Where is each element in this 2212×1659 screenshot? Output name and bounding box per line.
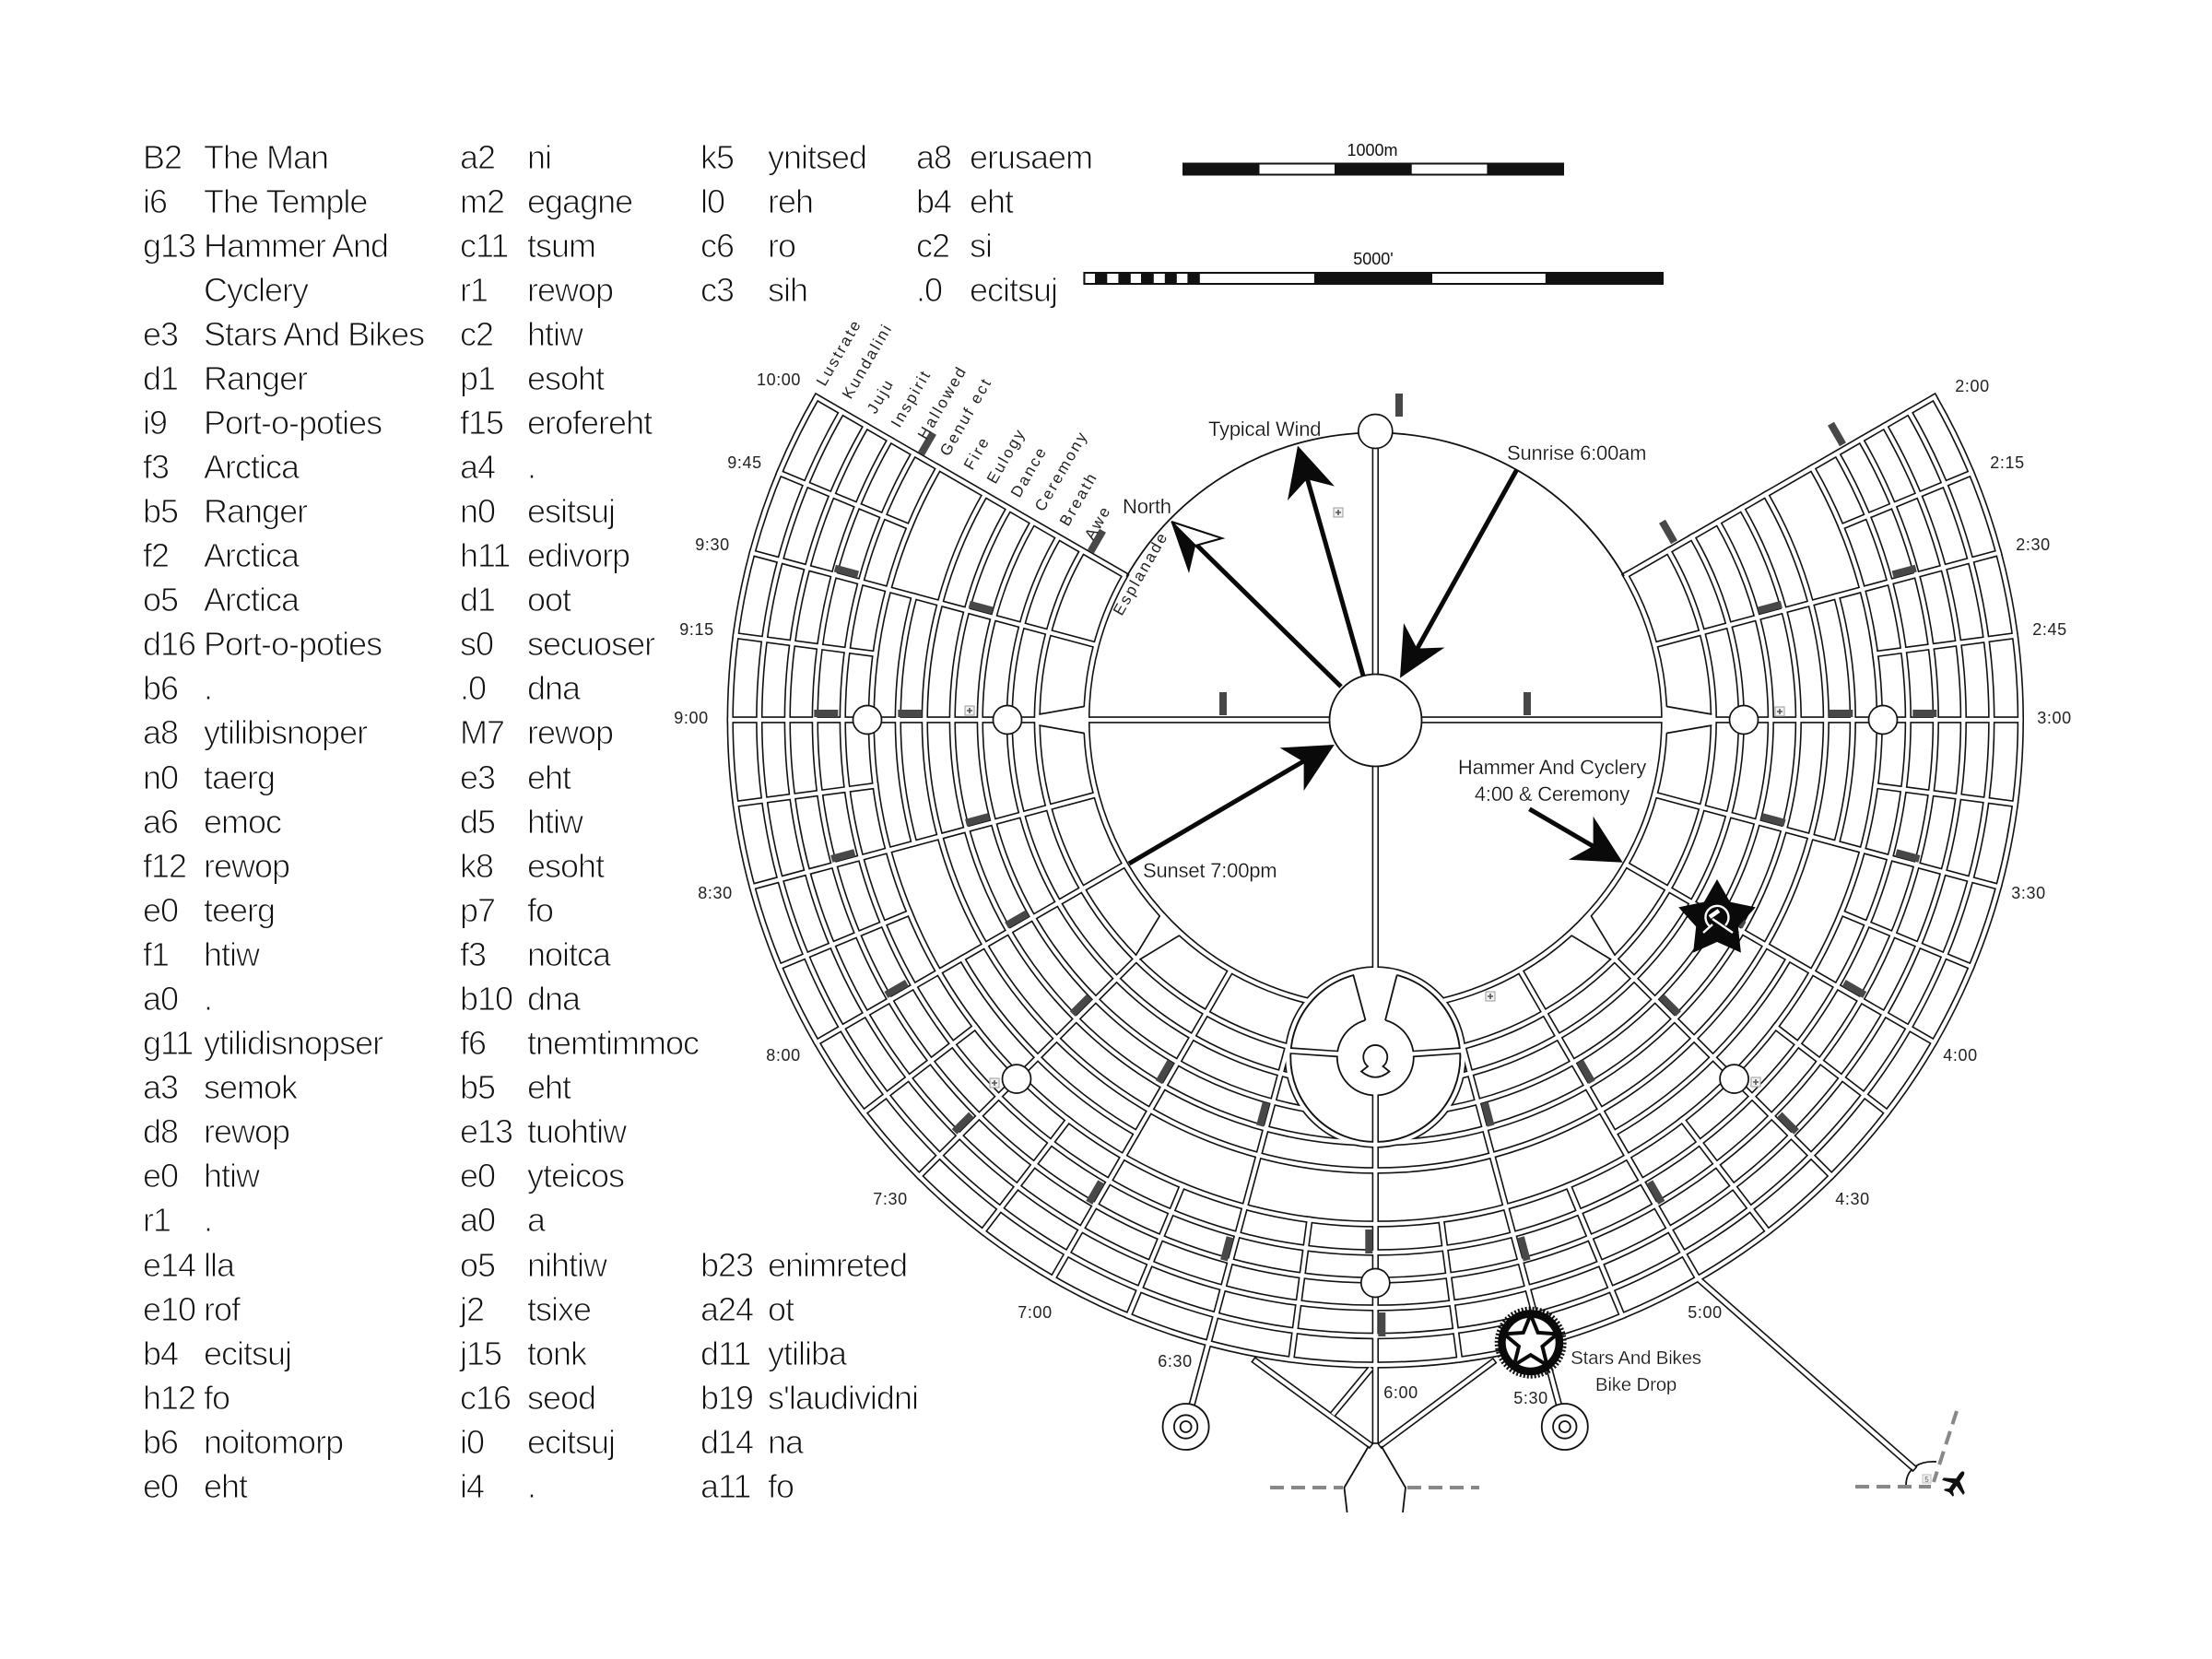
legend column 1: a8: [143, 713, 178, 751]
legend column 2: eht: [527, 759, 571, 796]
legend column 1: Port-o-poties: [204, 625, 382, 663]
legend column 3 bottom: a24: [700, 1290, 753, 1328]
legend column 1: h12: [143, 1379, 195, 1417]
legend column 2: rewop: [527, 271, 613, 309]
legend column 1: teerg: [204, 891, 275, 929]
legend column 1: n0: [143, 759, 178, 796]
upper esplanade arc: [1088, 433, 1663, 1006]
legend column 3 bottom: a11: [700, 1467, 750, 1505]
legend column 2: noitca: [527, 935, 612, 973]
street name labels: Fire: [960, 433, 994, 473]
legend column 1: e14: [143, 1246, 195, 1284]
icon: person: [1361, 1045, 1390, 1077]
legend column 2: d5: [460, 803, 495, 841]
legend column 2: esoht: [527, 847, 605, 885]
label: sunrise: Sunrise 6:00am: [1507, 441, 1646, 465]
clock time labels: 2:30: [2016, 535, 2051, 554]
legend column 1: a3: [143, 1068, 178, 1106]
street name labels: Eulogy: [983, 425, 1030, 487]
legend column 1: f3: [143, 448, 169, 486]
legend column 4: .0: [916, 271, 942, 309]
legend column 2: tsixe: [527, 1290, 591, 1328]
clock time labels: [674, 371, 2072, 1407]
clock time labels: 5:00: [1688, 1303, 1723, 1322]
clock time labels: 3:00: [2037, 709, 2072, 727]
legend column 1: e0: [143, 1467, 178, 1505]
legend column 2: m2: [460, 182, 504, 220]
legend column 1: b6: [143, 669, 178, 707]
legend column 4: ecitsuj: [970, 271, 1057, 309]
legend column 2: n0: [460, 492, 495, 530]
legend column 2: htiw: [527, 315, 584, 353]
legend column 2: tonk: [527, 1335, 588, 1372]
arrow: sunset: [1129, 745, 1335, 864]
legend column 1: f12: [143, 847, 186, 885]
legend column 1: Cyclery: [204, 271, 309, 309]
legend column 3 bottom: na: [768, 1423, 805, 1461]
legend column 3 bottom: ot: [768, 1290, 794, 1328]
legend column 3 top: c3: [700, 271, 734, 309]
legend column 1: Port-o-poties: [204, 404, 382, 441]
legend column 4: [916, 138, 1092, 309]
legend column 1: .: [204, 980, 212, 1018]
legend column 1: Arctica: [204, 448, 300, 486]
legend column 2: r1: [460, 271, 488, 309]
clock time labels: 2:15: [1990, 453, 2025, 472]
label: stars and bikes: [1571, 1347, 1701, 1395]
legend column 2: b10: [460, 980, 512, 1018]
clock time labels: 3:30: [2011, 884, 2046, 902]
legend column 1: d1: [143, 359, 178, 397]
legend column 3 top: ynitsed: [768, 138, 866, 176]
legend column 4: c2: [916, 227, 949, 265]
legend column 3 bottom: [700, 1246, 918, 1505]
legend column 2: s0: [460, 625, 493, 663]
legend column 3 bottom: b19: [700, 1379, 753, 1417]
legend column 2: e0: [460, 1157, 495, 1194]
legend column 4: si: [970, 227, 992, 265]
gate roads: [1344, 1446, 1406, 1512]
legend column 2: tuohtiw: [527, 1112, 628, 1150]
legend column 2: f15: [460, 404, 503, 441]
legend column 1: rewop: [204, 1112, 289, 1150]
legend column 2: .: [527, 448, 535, 486]
street name labels: Juju: [864, 375, 898, 417]
gate dashed lines: [1270, 1486, 1479, 1489]
gray street markers: [814, 565, 1936, 1336]
legend column 1: htiw: [204, 1157, 261, 1194]
legend column 1: Ranger: [204, 492, 308, 530]
legend column 2: a2: [460, 138, 495, 176]
scale bar: 1000m: 1000m: [1347, 141, 1398, 159]
legend column 1: b6: [143, 1423, 178, 1461]
clock time labels: 10:00: [757, 371, 801, 389]
legend column 1: f2: [143, 536, 169, 574]
street name labels: Breath: [1056, 469, 1101, 529]
street name labels: Esplanade: [1110, 528, 1171, 618]
label: hammer and cyclery: [1458, 756, 1646, 806]
legend column 1: a6: [143, 803, 178, 841]
legend column 2: nihtiw: [527, 1246, 608, 1284]
legend column 1: e10: [143, 1290, 195, 1328]
street name labels: Kundalini: [839, 320, 896, 402]
legend column 1: d16: [143, 625, 195, 663]
legend column 1: d8: [143, 1112, 178, 1150]
icon: hammer and sickle star: [1678, 879, 1756, 953]
legend column 1: fo: [204, 1379, 229, 1417]
legend column 2: M7: [460, 713, 504, 751]
legend column 2: k8: [460, 847, 493, 885]
legend column 2: oot: [527, 581, 571, 618]
street name labels: Hallowed: [914, 362, 971, 442]
center hub: [1329, 675, 1421, 767]
legend column 1: e0: [143, 891, 178, 929]
legend column 1: b5: [143, 492, 178, 530]
flared street mouths at esplanade: [1039, 706, 1712, 968]
label: sunset: Sunset 7:00pm: [1143, 859, 1277, 882]
left ring target: [1163, 1404, 1209, 1450]
legend column 2: rewop: [527, 713, 613, 751]
legend column 1: ytilidisnopser: [204, 1024, 383, 1062]
legend column 3 top: sih: [768, 271, 807, 309]
legend column 2: a4: [460, 448, 495, 486]
legend column 2: d1: [460, 581, 495, 618]
legend column 1: Arctica: [204, 581, 300, 618]
scale bar: 1000m: [1182, 141, 1564, 175]
street name labels: Dance: [1007, 443, 1051, 500]
legend column 4: eht: [970, 182, 1014, 220]
arrow: hammer and cyclery: [1529, 809, 1623, 863]
legend column 2: o5: [460, 1246, 495, 1284]
legend column 3 top: l0: [700, 182, 724, 220]
legend column 2: h11: [460, 536, 510, 574]
street name labels: [813, 316, 1171, 618]
legend column 2: f6: [460, 1024, 486, 1062]
legend column 1: g11: [143, 1024, 193, 1062]
airport: [1855, 1411, 1957, 1487]
legend column 1: B2: [143, 138, 182, 176]
legend column 3 top: ro: [768, 227, 795, 265]
clock time labels: 6:30: [1158, 1352, 1193, 1371]
legend column 1: eht: [204, 1467, 248, 1505]
street name labels: Ceremony: [1031, 428, 1091, 514]
legend column 2: esitsuj: [527, 492, 615, 530]
legend column 1: The Temple: [204, 182, 367, 220]
legend column 2: a0: [460, 1201, 495, 1239]
legend column 2: c11: [460, 227, 508, 265]
label: hammer and cyclery: 4:00 & Ceremony: [1475, 782, 1630, 806]
label: typical wind: Typical Wind: [1208, 418, 1321, 441]
legend column 1: semok: [204, 1068, 299, 1106]
legend column 3 top: [700, 138, 866, 309]
legend column 2: tsum: [527, 227, 595, 265]
legend column 2: c2: [460, 315, 493, 353]
clock time labels: 8:00: [766, 1046, 801, 1065]
legend column 4: b4: [916, 182, 951, 220]
legend column 1: b4: [143, 1335, 178, 1372]
legend column 4: a8: [916, 138, 951, 176]
legend column 1: Ranger: [204, 359, 308, 397]
gray outer edge markers: [918, 394, 1846, 715]
legend column 1: e0: [143, 1157, 178, 1194]
clock time labels: 9:45: [727, 453, 762, 472]
legend column 1: ytilibisnoper: [204, 713, 368, 751]
clock time labels: 5:30: [1513, 1389, 1548, 1407]
airport: 5: [1924, 1476, 1929, 1484]
right ring target: [1542, 1404, 1588, 1450]
street name labels: Genuf ect: [936, 374, 995, 459]
legend column 2: [459, 138, 700, 1505]
arrow: north: [1171, 522, 1341, 687]
legend column 2: seod: [527, 1379, 595, 1417]
legend column 2: secuoser: [527, 625, 655, 663]
label: stars and bikes: Bike Drop: [1595, 1374, 1677, 1395]
clock time labels: 7:30: [873, 1190, 908, 1208]
legend column 2: ni: [527, 138, 551, 176]
legend column 1: e3: [143, 315, 178, 353]
legend column 1: Arctica: [204, 536, 300, 574]
legend column 1: lla: [204, 1246, 236, 1284]
legend column 1: ecitsuj: [204, 1335, 291, 1372]
legend column 2: ecitsuj: [527, 1423, 615, 1461]
clock time labels: 2:45: [2032, 620, 2067, 639]
city street grid: [730, 75, 2020, 1467]
legend column 2: esoht: [527, 359, 605, 397]
center camp: [1289, 971, 1462, 1144]
legend column 1: rof: [204, 1290, 241, 1328]
clock time labels: 9:00: [674, 709, 709, 727]
small first-aid icons: [965, 508, 1784, 1088]
legend column 2: f3: [460, 935, 486, 973]
legend column 1: emoc: [204, 803, 282, 841]
street name labels: Lustrate: [813, 316, 865, 389]
legend column 1: The Man: [204, 138, 328, 176]
clock time labels: 8:30: [698, 884, 733, 902]
legend column 2: htiw: [527, 803, 584, 841]
clock time labels: 4:30: [1835, 1190, 1870, 1208]
legend column 3 bottom: b23: [700, 1246, 753, 1284]
icon: bike gear star: [1497, 1309, 1565, 1377]
legend column 3 top: reh: [768, 182, 813, 220]
legend column 2: p1: [460, 359, 495, 397]
legend column 2: .: [527, 1467, 535, 1505]
legend column 1: a0: [143, 980, 178, 1018]
legend column 2: yteicos: [527, 1157, 624, 1194]
label: north: North: [1123, 495, 1171, 518]
legend column 2: egagne: [527, 182, 632, 220]
legend column 2: c16: [460, 1379, 511, 1417]
arrow: sunrise: [1400, 470, 1517, 678]
legend column 2: eht: [527, 1068, 571, 1106]
legend column 3 top: k5: [700, 138, 734, 176]
legend column 2: fo: [527, 891, 553, 929]
legend column 2: erofereht: [527, 404, 653, 441]
legend column 1: g13: [143, 227, 195, 265]
legend column 4: erusaem: [970, 138, 1092, 176]
legend column 2: dna: [527, 669, 582, 707]
legend column 1: i6: [143, 182, 167, 220]
legend column 1: .: [204, 669, 212, 707]
legend column 2: p7: [460, 891, 495, 929]
clock time labels: 7:00: [1018, 1303, 1053, 1322]
legend column 2: j15: [459, 1335, 501, 1372]
label: hammer and cyclery: Hammer And Cyclery: [1458, 756, 1646, 779]
legend column 2: dna: [527, 980, 582, 1018]
legend column 1: noitomorp: [204, 1423, 343, 1461]
legend column 3 top: c6: [700, 227, 734, 265]
clock time labels: 9:15: [679, 620, 714, 639]
icon: airplane: [1938, 1465, 1974, 1500]
legend column 3 bottom: d11: [700, 1335, 750, 1372]
legend column 1: [143, 138, 424, 1505]
legend column 1: Hammer And: [204, 227, 388, 265]
legend column 3 bottom: fo: [768, 1467, 794, 1505]
legend column 3 bottom: s'laudividni: [768, 1379, 918, 1417]
scale bar: 5000 feet: 5000': [1353, 250, 1394, 268]
legend column 1: rewop: [204, 847, 289, 885]
street name labels: Inspirit: [888, 367, 935, 430]
legend column 2: b5: [460, 1068, 495, 1106]
legend column 1: r1: [143, 1201, 171, 1239]
legend column 2: i4: [460, 1467, 484, 1505]
plaza circles: [853, 415, 1897, 1298]
legend column 3 bottom: d14: [700, 1423, 753, 1461]
legend column 2: j2: [459, 1290, 484, 1328]
street name labels: Awe: [1081, 502, 1114, 543]
scale bar: 5000 feet: [1083, 250, 1664, 285]
legend column 2: e13: [460, 1112, 512, 1150]
legend column 1: .: [204, 1201, 212, 1239]
label: stars and bikes: Stars And Bikes: [1571, 1347, 1701, 1369]
legend column 3 bottom: enimreted: [768, 1246, 907, 1284]
legend column 1: htiw: [204, 935, 261, 973]
legend column 1: o5: [143, 581, 178, 618]
legend column 2: .0: [460, 669, 486, 707]
legend column 3 bottom: ytiliba: [768, 1335, 848, 1372]
legend column 2: a: [527, 1201, 547, 1239]
arrow: typical wind: [1288, 446, 1363, 676]
clock time labels: 2:00: [1955, 377, 1990, 395]
legend column 2: edivorp: [527, 536, 629, 574]
legend column 2: e3: [460, 759, 495, 796]
legend column 1: Stars And Bikes: [204, 315, 424, 353]
clock time labels: 9:30: [695, 535, 730, 554]
legend column 1: taerg: [204, 759, 275, 796]
legend column 2: i0: [460, 1423, 484, 1461]
clock time labels: 4:00: [1943, 1046, 1978, 1065]
legend column 1: i9: [143, 404, 167, 441]
legend column 1: f1: [143, 935, 169, 973]
clock time labels: 6:00: [1383, 1383, 1418, 1402]
legend column 2: tnemtimmoc: [527, 1024, 700, 1062]
